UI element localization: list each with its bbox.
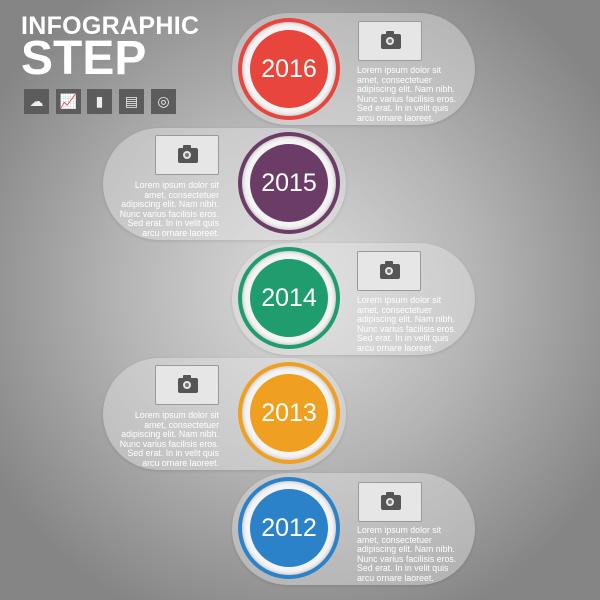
text 2016: amet, consectetuer: [357, 75, 432, 85]
text 2014: Sed erat. In in velit quis: [357, 333, 448, 343]
icon: target: ◎: [157, 93, 170, 109]
text 2016: arcu ornare laoreet.: [357, 113, 434, 123]
text 2013: arcu ornare laoreet.: [142, 458, 219, 468]
text 2013: Lorem ipsum dolor sit: [135, 410, 219, 420]
icon: cloud: ☁: [30, 93, 44, 109]
text 2012: Sed erat. In in velit quis: [357, 563, 448, 573]
circle 2015: 2015: [261, 169, 317, 197]
circle 2016: 2016: [261, 55, 317, 83]
text 2014: [357, 295, 456, 353]
icon: growth chart: 📈: [60, 93, 77, 109]
text 2015: amet, consectetuer: [144, 190, 219, 200]
title: INFOGRAPHIC: [21, 12, 199, 40]
text 2013: [120, 410, 219, 468]
text 2012: [357, 525, 456, 583]
photo placeholder: [358, 21, 422, 61]
title: STEP: [21, 32, 146, 85]
icon: target: [151, 89, 176, 114]
circle 2013: [238, 362, 340, 464]
step 2012: [232, 473, 475, 586]
icon row: [24, 89, 176, 114]
text 2016: Nunc varius facilisis eros.: [357, 94, 456, 104]
circle 2012: [238, 477, 340, 579]
icon: id card: ▤: [125, 93, 138, 109]
icon: growth chart: [56, 89, 81, 114]
step 2016: [232, 13, 475, 126]
icon: bar chart: ▮: [96, 93, 103, 109]
text 2013: adipiscing elit. Nam nibh.: [121, 429, 219, 439]
text 2012: amet, consectetuer: [357, 535, 432, 545]
circle 2016: [238, 18, 340, 120]
text 2013: Sed erat. In in velit quis: [128, 448, 219, 458]
circle 2014: 2014: [261, 284, 317, 312]
text 2016: Lorem ipsum dolor sit: [357, 65, 441, 75]
text 2013: Nunc varius facilisis eros.: [120, 439, 219, 449]
text 2015: Sed erat. In in velit quis: [128, 218, 219, 228]
step 2014: [232, 243, 476, 357]
circle 2013: 2013: [261, 399, 317, 427]
text 2015: Nunc varius facilisis eros.: [120, 209, 219, 219]
text 2014: arcu ornare laoreet.: [357, 343, 434, 353]
text 2012: Lorem ipsum dolor sit: [357, 525, 441, 535]
text 2015: arcu ornare laoreet.: [142, 228, 219, 238]
text 2015: adipiscing elit. Nam nibh.: [121, 199, 219, 209]
icon: bar chart: [87, 89, 112, 114]
circle 2012: 2012: [261, 514, 317, 542]
text 2013: amet, consectetuer: [144, 420, 219, 430]
icon: id card: [119, 89, 144, 114]
text 2012: arcu ornare laoreet.: [357, 573, 434, 583]
icon: cloud: [24, 89, 49, 114]
text 2016: [357, 65, 456, 123]
photo placeholder: [358, 482, 422, 522]
text 2012: adipiscing elit. Nam nibh.: [357, 544, 455, 554]
title: [21, 12, 199, 85]
photo placeholder: [155, 135, 219, 175]
text 2014: Nunc varius facilisis eros.: [357, 324, 456, 334]
photo placeholder: [357, 251, 421, 291]
text 2015: Lorem ipsum dolor sit: [135, 180, 219, 190]
text 2014: adipiscing elit. Nam nibh.: [357, 314, 455, 324]
text 2012: Nunc varius facilisis eros.: [357, 554, 456, 564]
step 2013: [102, 358, 346, 472]
step 2015: [102, 128, 346, 242]
text 2016: Sed erat. In in velit quis: [357, 103, 448, 113]
text 2015: [120, 180, 219, 238]
photo placeholder: [155, 365, 219, 405]
circle 2014: [238, 247, 340, 349]
text 2014: amet, consectetuer: [357, 305, 432, 315]
text 2014: Lorem ipsum dolor sit: [357, 295, 441, 305]
circle 2015: [238, 132, 340, 234]
text 2016: adipiscing elit. Nam nibh.: [357, 84, 455, 94]
